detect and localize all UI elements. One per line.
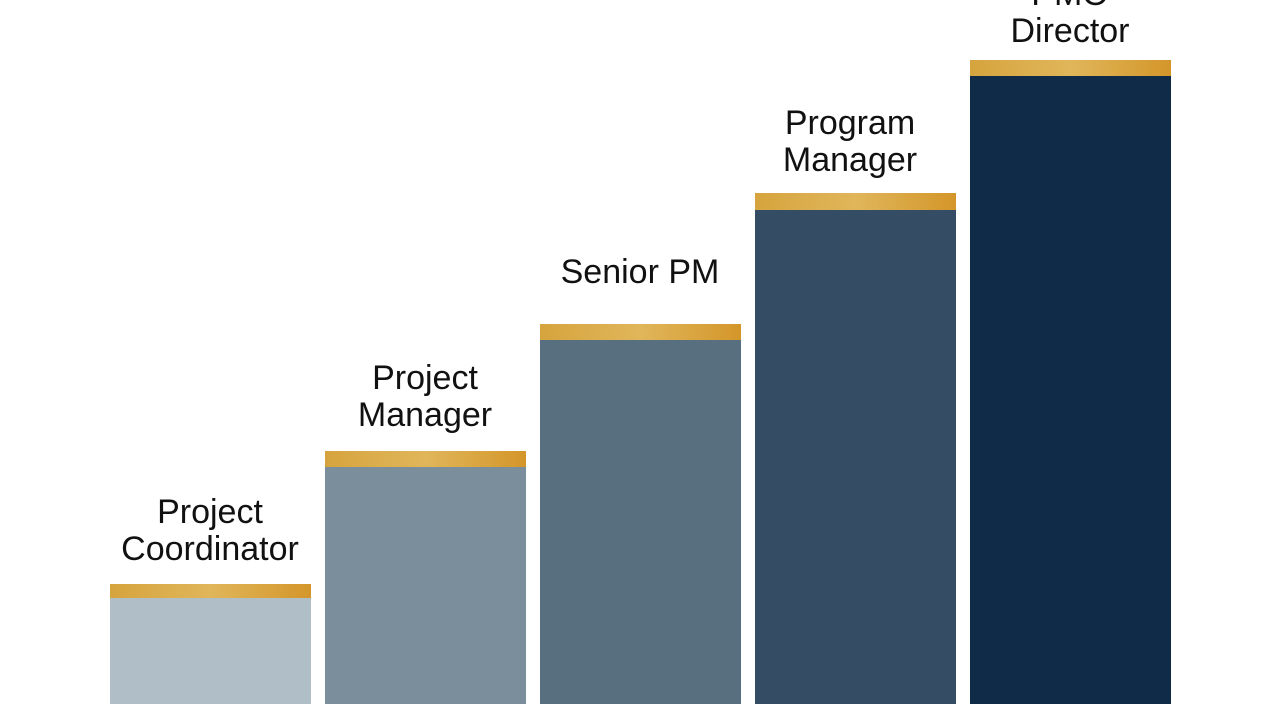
label: Project Coordinator — [121, 493, 299, 568]
label: PMO Director: Director — [1010, 12, 1130, 50]
label: Project Coordinator: Coordinator — [121, 530, 299, 568]
label: Program Manager: Manager — [783, 141, 917, 179]
label: Program Manager — [783, 104, 917, 179]
bar: Program Manager — [755, 193, 956, 704]
bar: PMO Director — [970, 60, 1171, 704]
label: Program Manager: Program — [785, 104, 915, 142]
label: Project Coordinator: Project — [157, 493, 263, 531]
bar: Project Manager — [325, 451, 526, 704]
label: Senior PM: Senior PM — [561, 253, 719, 291]
bar: Senior PM — [540, 324, 741, 704]
bar: Project Coordinator — [110, 584, 311, 704]
label: Project Manager: Project — [372, 359, 478, 397]
label: Project Manager: Manager — [358, 396, 492, 434]
label: Project Manager — [358, 359, 492, 434]
